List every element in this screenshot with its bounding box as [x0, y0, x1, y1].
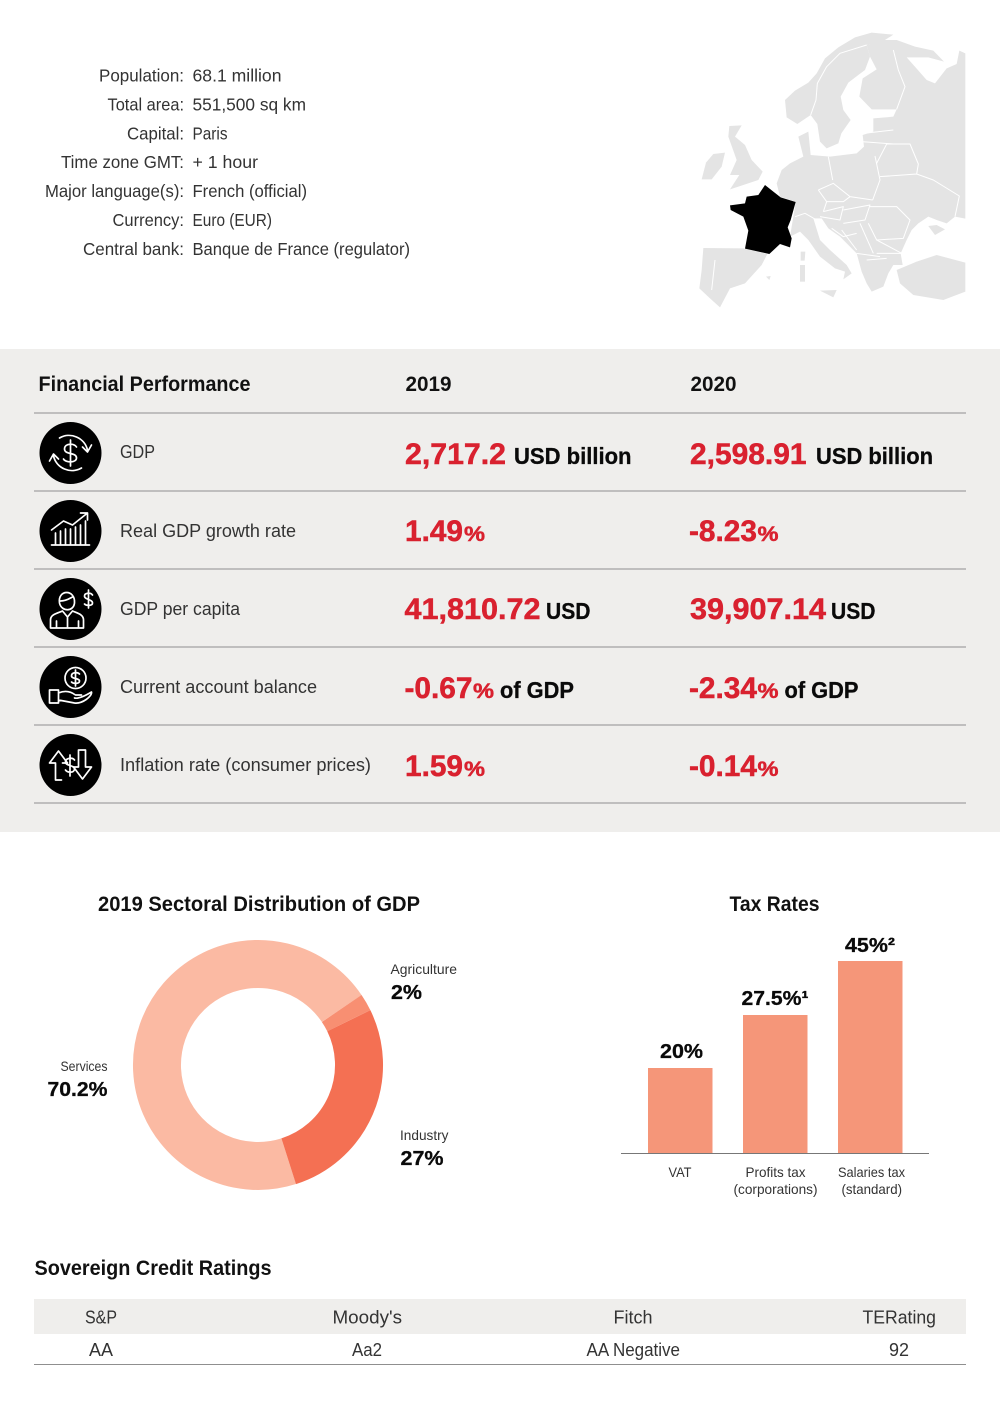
row: real GDP growth rate: [40, 500, 779, 562]
label: services: [48, 1058, 108, 1101]
bar chart: 20%: [660, 1041, 703, 1063]
bar chart: 27.5%¹: [742, 988, 809, 1010]
country facts: + 1 hour: [192, 152, 258, 172]
ratings table: TERating: [862, 1308, 936, 1328]
bar chart: (corporations): [734, 1181, 818, 1197]
panel: tax rates: [621, 892, 929, 1197]
row: real GDP growth rate: Real GDP growth rate: [120, 521, 296, 541]
row: real GDP growth rate: -8.23: [689, 515, 757, 548]
row: current account balance: of GDP: [500, 677, 574, 703]
country facts: Major language(s):: [45, 181, 184, 201]
row: GDP per capita: USD: [831, 598, 876, 624]
icon: growth chart: [40, 500, 102, 562]
country facts: French (official): [192, 181, 307, 201]
row: current account balance: %: [758, 680, 779, 703]
row: GDP per capita: 39,907.14: [690, 593, 826, 626]
ratings table: Fitch: [614, 1308, 652, 1328]
ratings table: Aa2: [352, 1340, 382, 1360]
bar chart: 45%²: [845, 935, 895, 957]
row: current account balance: [40, 656, 858, 718]
donut chart: [157, 964, 359, 1166]
icon: arrows with dollar: [40, 734, 102, 796]
bar chart: VAT: [668, 1164, 692, 1180]
country facts: 68.1 million: [192, 66, 282, 86]
country facts: Paris: [192, 124, 228, 144]
row: GDP: 2,598.91: [690, 438, 806, 471]
ratings table: AA Negative: [586, 1340, 680, 1360]
tax heading: Tax Rates: [730, 892, 820, 916]
map of Europe with France highlighted: [699, 33, 965, 307]
table headings: 2019: [406, 372, 452, 396]
country facts: Time zone GMT:: [61, 152, 184, 172]
row: GDP: GDP: [120, 442, 155, 462]
row: inflation rate: -0.14: [689, 750, 757, 783]
row: GDP per capita: GDP per capita: [120, 599, 241, 619]
ratings heading: Sovereign Credit Ratings: [34, 1256, 272, 1280]
row: current account balance: %: [473, 680, 494, 703]
row: GDP: USD billion: [816, 443, 933, 469]
label: agriculture: Agriculture: [390, 961, 457, 977]
row: current account balance: of GDP: [784, 677, 858, 703]
row: current account balance: Current account balance: [120, 677, 317, 697]
bar chart: [621, 935, 929, 1197]
row: inflation rate: %: [758, 758, 779, 781]
row: real GDP growth rate: 1.49: [405, 515, 463, 548]
panel: sectoral distribution of GDP: [48, 892, 457, 1170]
panel: sovereign credit ratings: [34, 1256, 966, 1364]
ratings table: S&P: [85, 1308, 117, 1328]
icon: hand holding coin: [40, 656, 102, 718]
country facts: Banque de France (regulator): [192, 239, 410, 259]
bar chart: (standard): [842, 1181, 902, 1197]
label: industry: Industry: [400, 1127, 448, 1143]
country facts: Capital:: [127, 124, 184, 144]
donut heading: 2019 Sectoral Distribution of GDP: [98, 892, 420, 916]
panel: financial performance: [0, 349, 1000, 832]
label: industry: [400, 1127, 448, 1170]
row: real GDP growth rate: %: [758, 523, 779, 546]
label: services: Services: [60, 1058, 108, 1074]
ratings table: [34, 1299, 966, 1364]
country facts: Population:: [99, 66, 184, 86]
row: current account balance: -0.67: [404, 672, 472, 705]
ratings table: Moody's: [332, 1308, 402, 1328]
country facts: [45, 66, 410, 259]
country facts: Euro (EUR): [192, 210, 272, 230]
row: inflation rate: Inflation rate (consumer prices): [120, 755, 371, 775]
row: GDP per capita: USD: [546, 598, 590, 624]
bar chart: Profits tax: [746, 1164, 806, 1180]
row: GDP: [40, 422, 933, 484]
icon: businessman with dollar: [40, 578, 102, 640]
label: services: 70.2%: [48, 1079, 108, 1101]
label: agriculture: 2%: [391, 982, 422, 1004]
country facts: 551,500 sq km: [192, 94, 306, 114]
row: GDP: USD billion: [514, 443, 632, 469]
label: industry: 27%: [400, 1148, 444, 1170]
table headings: 2020: [690, 372, 737, 396]
country facts: Currency:: [112, 210, 184, 230]
row: inflation rate: %: [464, 758, 485, 781]
table headings: Financial Performance: [38, 372, 251, 396]
row: inflation rate: [40, 734, 779, 796]
table headings: [38, 372, 737, 396]
icon: rotating dollar: [40, 422, 102, 484]
row: inflation rate: 1.59: [405, 750, 463, 783]
row: GDP per capita: [40, 578, 876, 640]
row: GDP per capita: 41,810.72: [404, 593, 540, 626]
row: real GDP growth rate: %: [464, 523, 485, 546]
ratings table: 92: [889, 1340, 909, 1360]
country facts: Total area:: [108, 94, 184, 114]
ratings table: AA: [89, 1340, 113, 1360]
row: current account balance: -2.34: [689, 672, 757, 705]
bar chart: Salaries tax: [838, 1164, 905, 1180]
label: agriculture: [390, 961, 457, 1004]
row: GDP: 2,717.2: [405, 438, 506, 471]
country facts: Central bank:: [83, 239, 184, 259]
